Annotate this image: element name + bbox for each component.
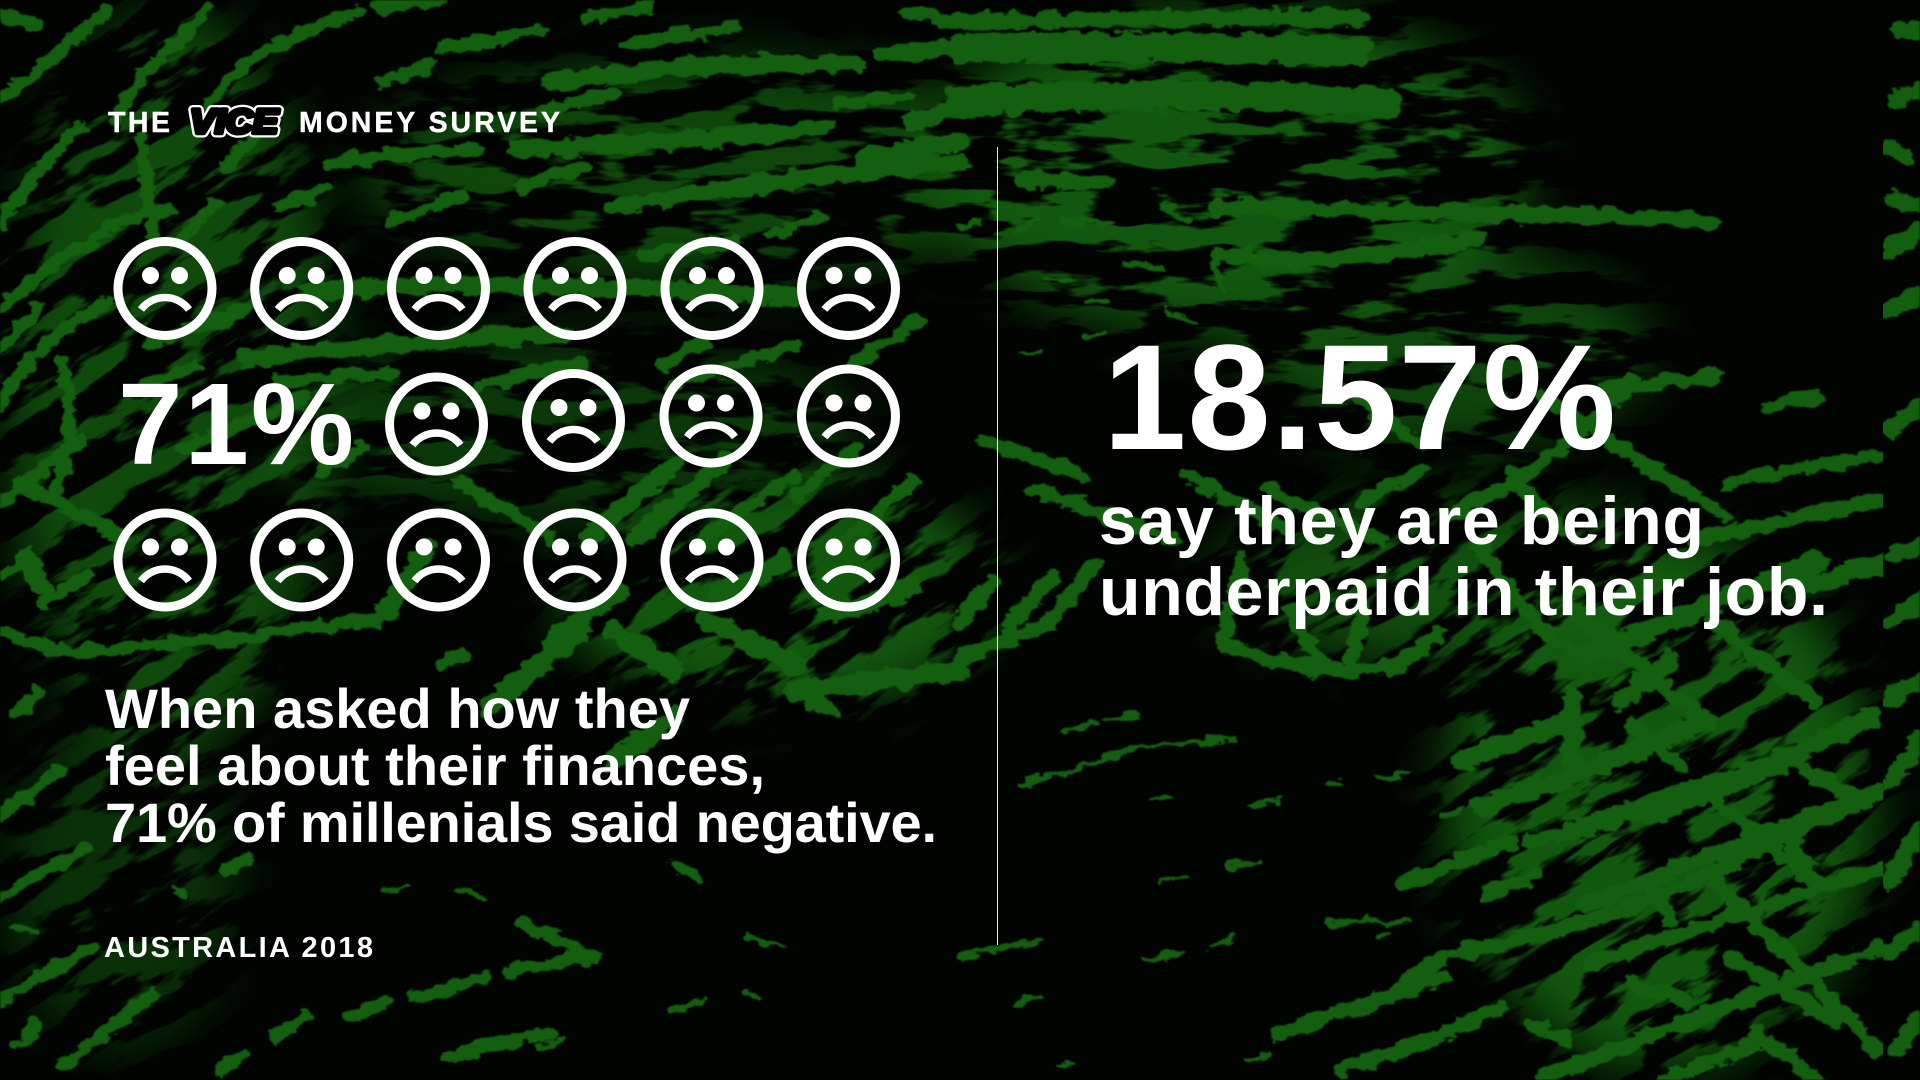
- text block: underpaid statement: underpaid in their job.: [1099, 554, 1828, 630]
- row 3 of sad faces: [118, 513, 896, 607]
- text block: underpaid statement: say they are being: [1099, 483, 1704, 559]
- header text: THE: THE: [108, 107, 170, 139]
- header: the VICE money survey: [108, 103, 560, 141]
- texture ridges: upper left: [0, 0, 960, 540]
- header text: money survey: MONEY SURVEY: [299, 107, 560, 139]
- face grid: 71% sad faces: [118, 242, 896, 607]
- text block: finances statement: feel about their finances,: [105, 734, 765, 797]
- right edge strip of texture: [1890, 30, 1920, 1050]
- row 2 of sad faces: [390, 369, 896, 471]
- statistic: 71%: 71%: [118, 359, 354, 489]
- logo: VICE: VICE: [190, 103, 279, 141]
- text block: underpaid statement: [1099, 483, 1828, 630]
- statistic: 18.57%: 18.57%: [1103, 313, 1616, 481]
- texture ridges: upper right network: [960, 17, 1883, 540]
- text block: finances statement: [105, 677, 937, 854]
- texture ridges: lower left: [0, 547, 960, 1070]
- footer: Australia 2018: AUSTRALIA 2018: [104, 932, 373, 964]
- texture ridges: lower right network: [960, 547, 1883, 1080]
- text block: finances statement: When asked how they: [105, 677, 690, 740]
- vertical divider: [997, 147, 998, 945]
- text block: finances statement: 71% of millenials said negative.: [105, 791, 937, 854]
- row 1 of sad faces: [118, 242, 896, 336]
- logo: VICE: VICE: [190, 103, 279, 141]
